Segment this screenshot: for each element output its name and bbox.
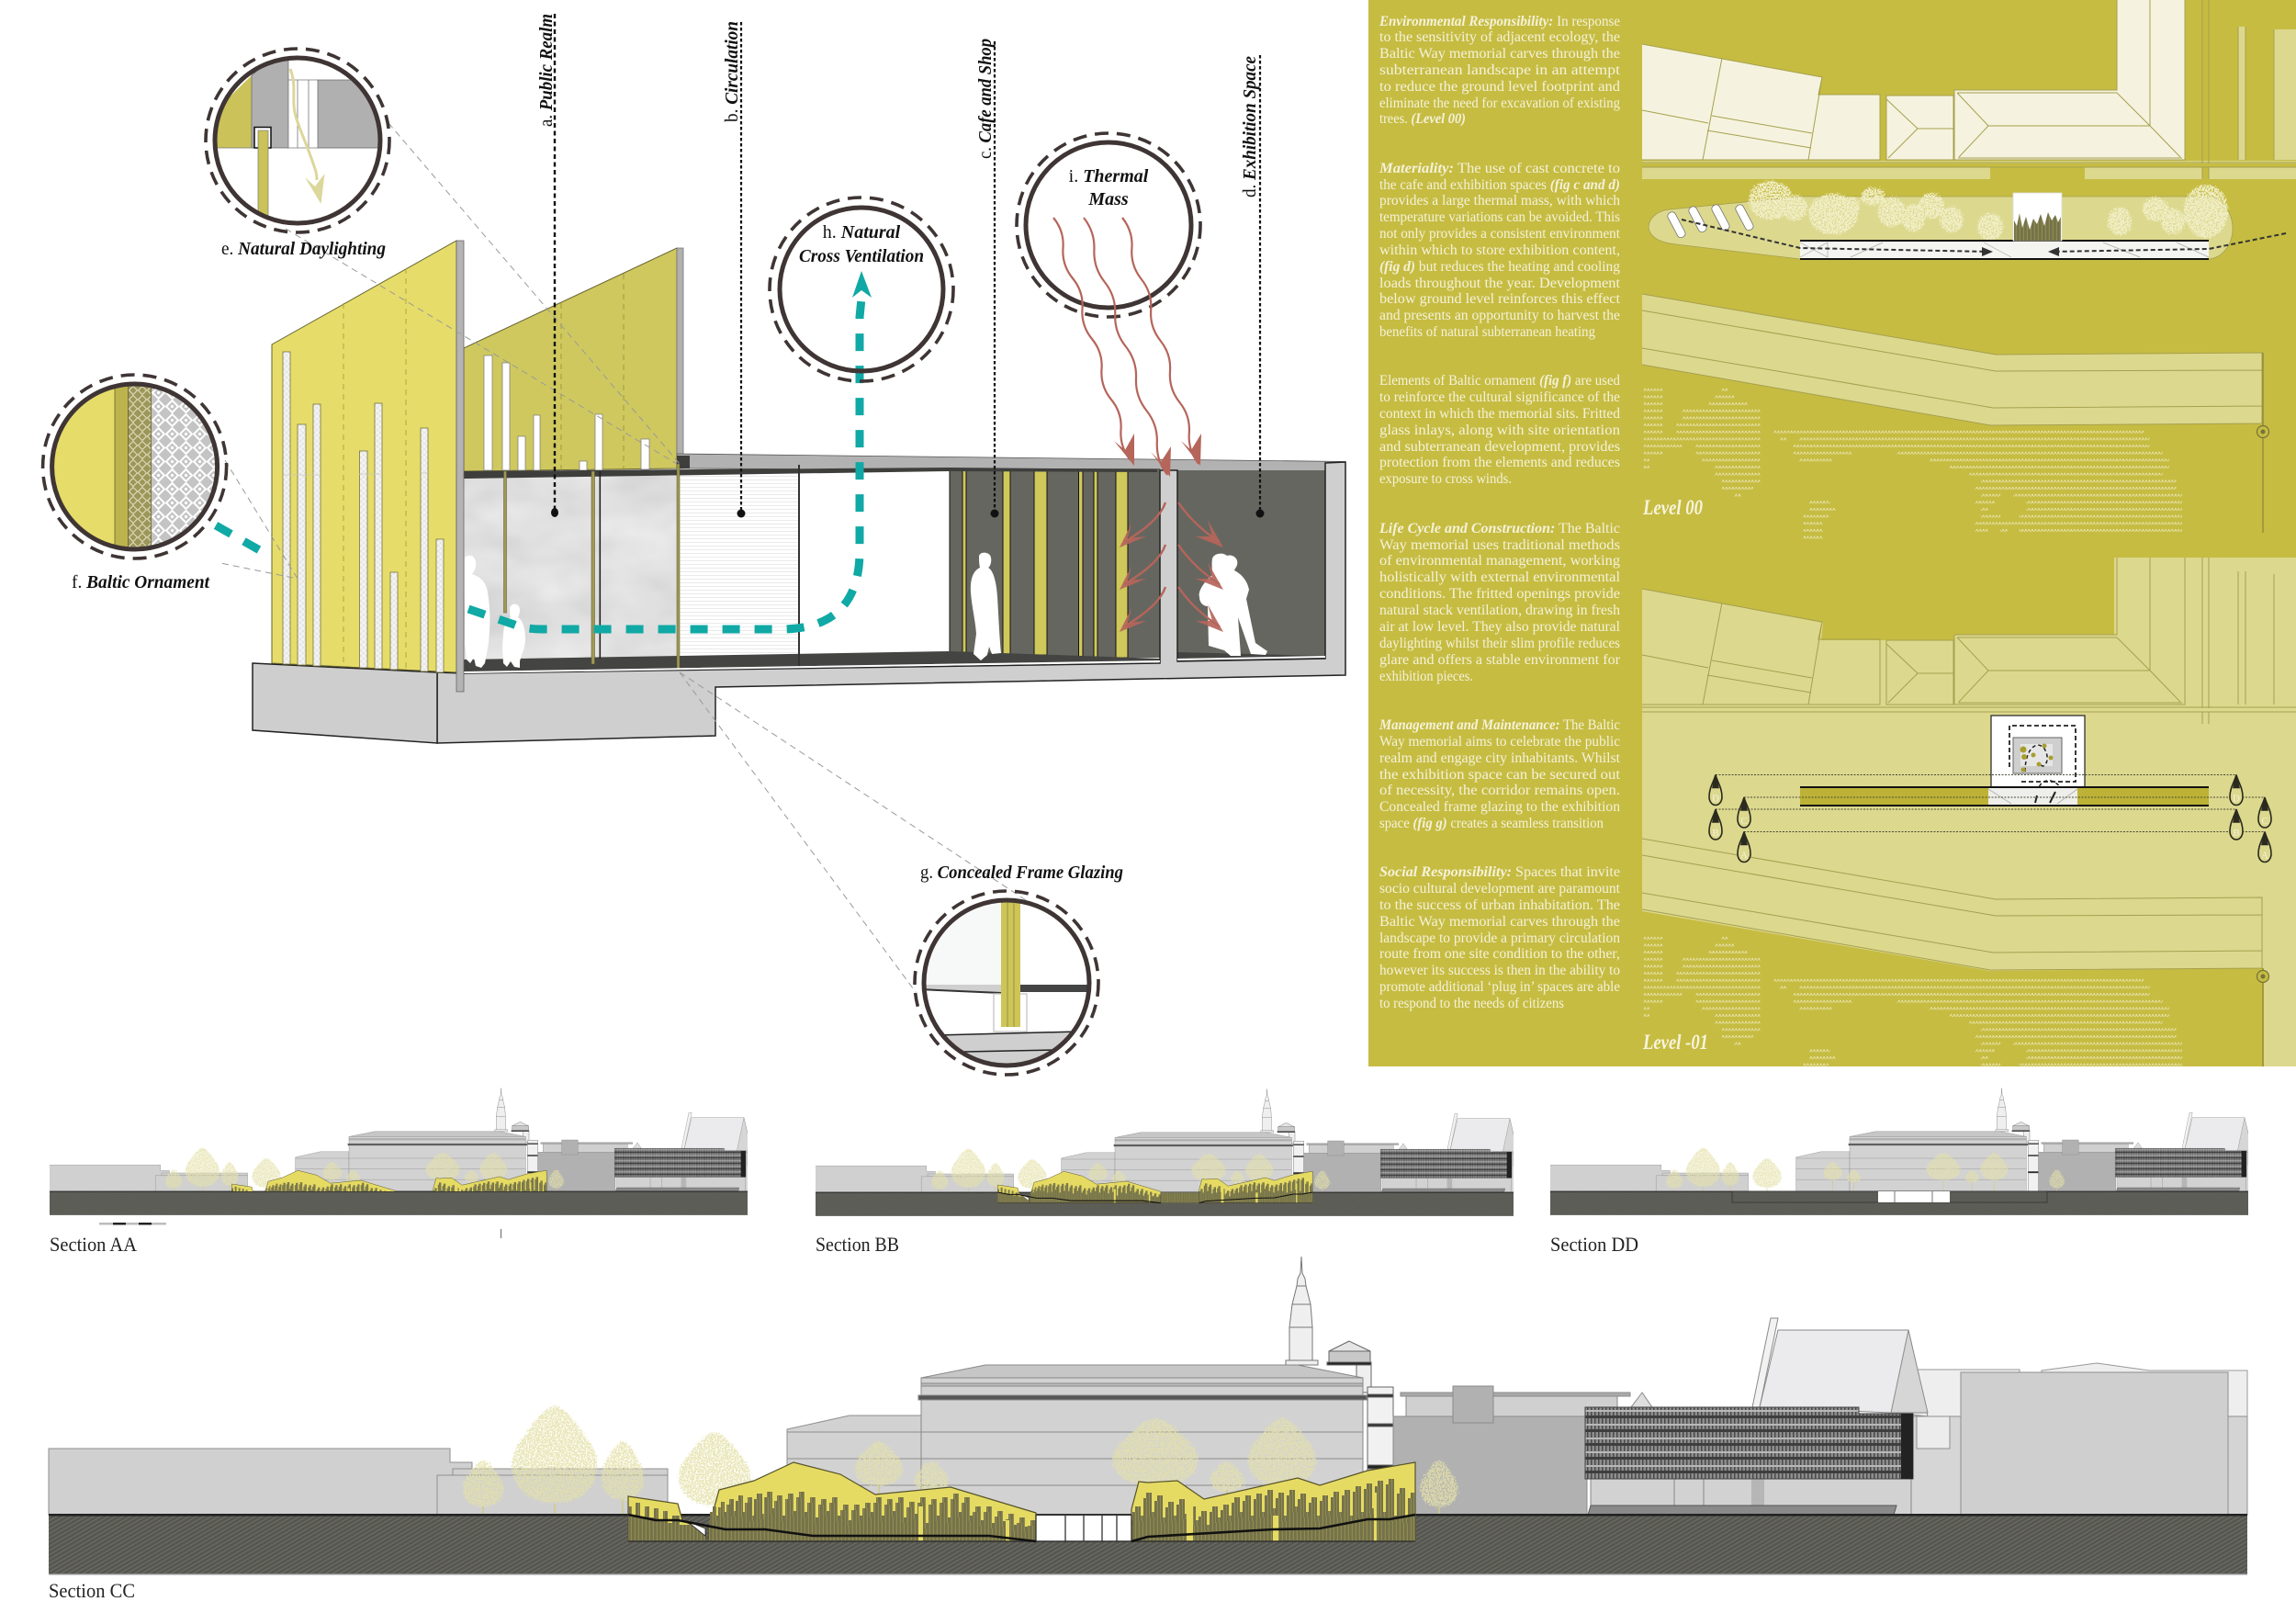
plan: ground fill <box>1642 558 2296 1066</box>
label line: b. Circulation <box>722 21 746 518</box>
label: g. Concealed Frame Glazing: g. Concealed Frame Glazing <box>920 863 1123 883</box>
text: Baltic ornament: exposure to cross winds. <box>1379 471 1512 487</box>
plan: edge line and node <box>2257 353 2268 533</box>
text: Baltic ornament: glass inlays, along with site orientation <box>1379 423 1620 438</box>
ring <box>924 900 1089 1066</box>
text: Life Cycle and Construction: of environmental management, working <box>1379 553 1620 569</box>
plan: water marks <box>1644 937 2182 1066</box>
teal arrow head <box>852 271 872 298</box>
back yellow wall with slots <box>464 248 683 471</box>
dark floors <box>464 651 1325 673</box>
thermal arrows into room <box>1124 502 1220 626</box>
ring <box>52 384 218 549</box>
icon: adult and child silhouettes <box>465 556 525 668</box>
marker B left <box>1709 809 1722 840</box>
text: Materiality: and presents an opportunity to harvest the <box>1379 308 1620 323</box>
text: Social Responsibility: to the success of urban inhabitation. The <box>1379 897 1620 913</box>
plinth <box>253 663 437 743</box>
marker A left: A <box>1740 851 1748 862</box>
marker A left <box>1738 832 1750 862</box>
plan: water marks <box>1644 387 2182 541</box>
marker C left <box>1738 797 1750 828</box>
corridor glass wall <box>464 476 680 671</box>
text: Social Responsibility: to respond to the needs of citizens <box>1379 996 1564 1011</box>
circle i: thermal mass: Mass <box>1087 189 1129 209</box>
text: Environmental Responsibility: Baltic Way memorial carves through the <box>1379 46 1620 62</box>
thermal arrow heads <box>1114 434 1201 477</box>
ring <box>215 58 380 223</box>
concrete floor and walls <box>437 462 1345 743</box>
text: Baltic ornament: Elements of Baltic ornament (fig f) are used <box>1379 373 1620 389</box>
label: f. Baltic Ornament: f. Baltic Ornament <box>72 572 210 592</box>
text: Environmental Responsibility: to the sensitivity of adjacent ecology, the <box>1379 29 1620 45</box>
text: Management and Maintenance: Management and Maintenance: The Baltic <box>1379 717 1620 733</box>
label line: d. Exhibition Space: d. Exhibition Space <box>1240 56 1260 197</box>
text: Baltic ornament: to reinforce the cultural significance of the <box>1379 389 1620 405</box>
text: Management and Maintenance: Way memorial aims to celebrate the public <box>1379 734 1620 750</box>
text: Management and Maintenance: Concealed frame glazing to the exhibition <box>1379 799 1620 815</box>
text: Life Cycle and Construction: Life Cycle and Construction: The Baltic <box>1379 521 1620 536</box>
marker B right: B <box>2233 828 2240 839</box>
plan: park capsule <box>1649 197 2233 259</box>
icon: exhibition visitors silhouette <box>1199 554 1267 656</box>
text: Environmental Responsibility: subterranean landscape in an attempt <box>1379 62 1621 78</box>
marker C right <box>2258 797 2271 828</box>
circle f: Baltic ornament detail <box>43 375 227 560</box>
text: Social Responsibility: Baltic Way memorial carves through the <box>1379 914 1620 930</box>
plan: linework <box>1642 0 2296 425</box>
corridor columns <box>503 464 800 672</box>
text: Social Responsibility: promote additional ‘plug in’ spaces are able <box>1379 979 1620 995</box>
text: Materiality: provides a large thermal mass, with which <box>1379 193 1620 209</box>
label line: a. Public Realm <box>536 14 558 517</box>
text: Life Cycle and Construction: conditions. The fritted openings provide <box>1379 586 1620 602</box>
heading: Level 00: Level 00 <box>1642 496 1703 519</box>
text: Social Responsibility: however its success is then in the ability to <box>1379 963 1620 978</box>
plan: road strips <box>1642 27 2296 179</box>
axonometric section drawing <box>216 14 1345 992</box>
text: Materiality: benefits of natural subterranean heating <box>1379 324 1595 340</box>
label line: a. Public Realm: a. Public Realm <box>536 14 557 127</box>
icon: cafe person silhouette <box>971 553 1001 660</box>
text: Life Cycle and Construction: daylighting whilst their slim profile reduces <box>1379 636 1620 651</box>
circle h: natural cross ventilation: h. Natural <box>823 222 901 242</box>
text: Life Cycle and Construction: Way memorial uses traditional methods <box>1379 537 1620 553</box>
marker A right <box>2258 832 2271 862</box>
white corridor end <box>799 468 950 666</box>
north mark <box>500 1229 501 1238</box>
circle e: natural daylighting detail <box>206 49 389 232</box>
ceiling band <box>464 468 1157 479</box>
heading: Level -01: Level -01 <box>1642 1031 1708 1054</box>
text: Social Responsibility: route from one site condition to the other, <box>1379 946 1620 962</box>
front yellow wall with fritted slots <box>272 241 464 692</box>
circulation lined wall <box>678 470 799 669</box>
label: Section BB: Section BB <box>816 1233 899 1256</box>
text: Baltic ornament: and subterranean development, provides <box>1379 439 1620 455</box>
marker C right: C <box>2261 816 2268 827</box>
text: Life Cycle and Construction: holistically with external environmental <box>1379 570 1621 585</box>
label: Section CC: Section CC <box>49 1579 135 1602</box>
text: Management and Maintenance <box>1379 717 1621 831</box>
section CC drawing <box>49 1257 2247 1574</box>
text: Social Responsibility <box>1379 864 1621 1011</box>
label: e. Natural Daylighting: e. Natural Daylighting <box>221 239 386 259</box>
marker D right <box>2230 775 2243 805</box>
text: Materiality: not only provides a consistent environment <box>1379 226 1621 242</box>
text: Materiality: the cafe and exhibition spaces (fig c and d) <box>1379 177 1620 193</box>
text: Social Responsibility: landscape to provide a primary circulation <box>1379 930 1620 946</box>
text: Environmental Responsibility: trees. (Level 00) <box>1379 111 1466 127</box>
circle h: natural cross ventilation <box>770 197 953 381</box>
text: Management and Maintenance: realm and engage city inhabitants. Whilst <box>1379 750 1621 766</box>
text: Management and Maintenance: the exhibition space can be secured out <box>1379 767 1621 783</box>
text: Life Cycle and Construction: exhibition pieces. <box>1379 669 1473 684</box>
label line: c. Cafe and Shop <box>975 39 999 518</box>
text: Life Cycle and Construction: natural stack ventilation, drawing in fresh <box>1379 603 1620 618</box>
marker B right <box>2230 809 2243 840</box>
circle i: thermal mass <box>1017 133 1201 477</box>
marker D right: D <box>2233 794 2240 805</box>
section AA drawing <box>0 1088 880 1238</box>
text: Life Cycle and Construction: air at low level. They also provide natural <box>1379 619 1621 635</box>
right panel: olive background <box>1368 0 2296 1066</box>
plan: existing buildings <box>1642 0 2185 160</box>
label: Section DD: Section DD <box>1550 1233 1638 1256</box>
text: Materiality: temperature variations can be avoided. This <box>1379 209 1620 225</box>
plan: route arrow heads <box>1982 247 2059 256</box>
text: Materiality: loads throughout the year. Development <box>1379 276 1621 291</box>
natural ventilation teal arrow <box>216 299 861 629</box>
circle h: natural cross ventilation: Cross Ventilation <box>799 246 924 266</box>
section DD drawing <box>1501 1088 2296 1215</box>
white floor line <box>464 657 1325 672</box>
label line: b. Circulation: b. Circulation <box>722 21 742 122</box>
section BB drawing <box>766 1089 1646 1216</box>
text: Environmental Responsibility: to reduce the ground level footprint and <box>1379 79 1620 95</box>
text: Materiality <box>1379 161 1621 340</box>
thermal radiation wavy arrows <box>1053 218 1199 475</box>
plan: lower road <box>1642 294 2262 425</box>
concealed glazing and daylighting leader lines <box>220 123 1026 992</box>
text: Life Cycle and Construction: glare and offers a stable environment for <box>1379 652 1621 668</box>
scale bar <box>99 1223 166 1225</box>
plan: exhibition block <box>2013 193 2062 241</box>
text: Baltic ornament: protection from the elements and reduces <box>1379 455 1620 470</box>
thermal arrow heads in room <box>1120 520 1223 632</box>
marker C left: C <box>1740 816 1748 827</box>
text: Materiality: (fig d) but reduces the heating and cooling <box>1379 259 1620 275</box>
label line: c. Cafe and Shop: c. Cafe and Shop <box>975 39 996 159</box>
marker D left <box>1709 775 1722 805</box>
text: Social Responsibility: Social Responsibility: Spaces that invite <box>1379 864 1620 880</box>
level 00 plan <box>1642 0 2296 541</box>
plan: linework <box>1642 545 2296 970</box>
marker A right: A <box>2261 851 2268 862</box>
label: Section AA: Section AA <box>50 1233 137 1256</box>
plan: cars <box>1666 203 1754 239</box>
text: Materiality: Materiality: The use of cast concrete to <box>1379 161 1620 176</box>
text: Materiality: below ground level reinforces this effect <box>1379 291 1621 307</box>
text: Management and Maintenance: space (fig g) creates a seamless transition <box>1379 816 1604 831</box>
marker D left: D <box>1712 794 1719 805</box>
roof slab <box>677 454 1345 472</box>
circle g: concealed frame glazing detail <box>915 891 1098 1084</box>
cafe dark wall with yellow strips <box>950 468 1160 658</box>
roof edge block <box>677 456 690 468</box>
text: Social Responsibility: socio cultural development are paramount <box>1379 881 1621 897</box>
text: Environmental Responsibility <box>1379 14 1621 127</box>
plan: section lines <box>1716 775 2265 832</box>
plan: circulation route <box>1682 220 2286 252</box>
text: Materiality: within which to store exhibition content, <box>1379 242 1620 258</box>
label line: d. Exhibition Space <box>1240 55 1264 518</box>
exhibition room dark wall <box>1177 470 1325 658</box>
text: Baltic ornament <box>1379 373 1620 487</box>
plan: edge line and node <box>2257 968 2268 1066</box>
text: Baltic ornament: context in which the memorial sits. Fritted <box>1379 406 1620 422</box>
text: Environmental Responsibility: eliminate the need for excavation of existing <box>1379 96 1620 111</box>
text: Life Cycle and Construction <box>1379 521 1621 684</box>
circle i: thermal mass: i. Thermal <box>1069 166 1149 186</box>
level -01 plan <box>1642 545 2296 1089</box>
plan: memorial strip <box>1800 787 2209 806</box>
marker B left: B <box>1712 828 1719 839</box>
section markers <box>1709 775 2271 862</box>
plan: exhibition room <box>1990 715 2086 786</box>
underground corridor <box>1732 1191 2047 1202</box>
text: Management and Maintenance: of necessity, the corridor remains open. <box>1379 783 1620 798</box>
text: Environmental Responsibility: Environmental Responsibility: In response <box>1379 14 1620 29</box>
plan: trees <box>1749 181 2228 241</box>
plan: memorial strip <box>1800 241 2209 259</box>
